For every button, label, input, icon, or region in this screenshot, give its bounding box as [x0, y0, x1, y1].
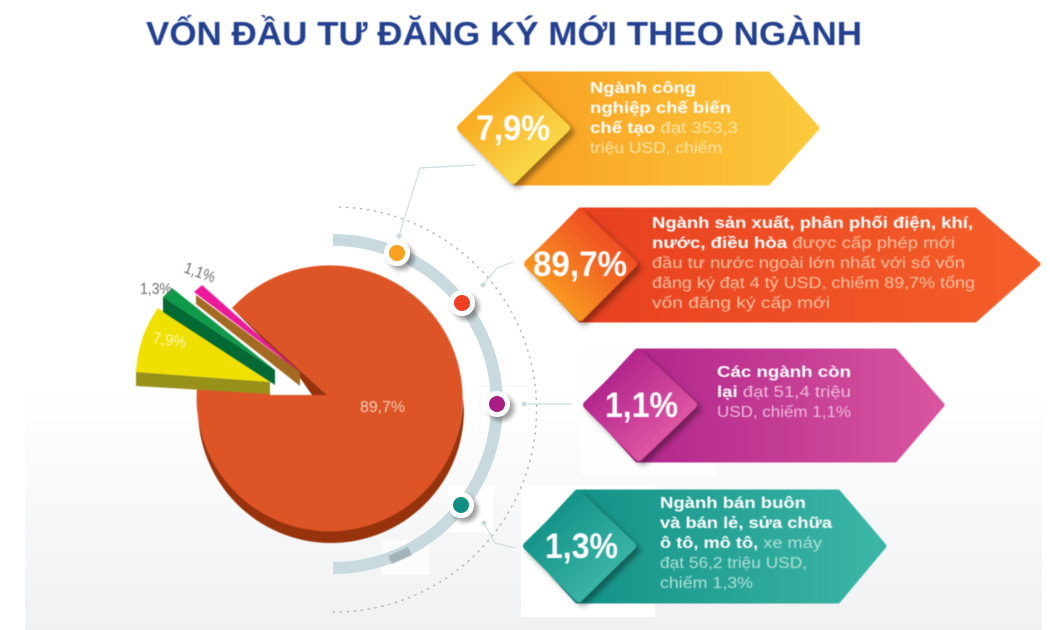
- pie chart: [136, 260, 464, 543]
- marker: teal: [448, 492, 474, 518]
- text: 1,3%: [660, 495, 832, 592]
- text: 7,9%: triệu USD, chiếm: [590, 140, 722, 157]
- panel: 1,1%: [587, 351, 942, 460]
- text: 1,3%: Ngành bán buôn: [660, 495, 806, 512]
- badge: 1,3%: [527, 495, 632, 598]
- text: 7,9%: nghiệp chế biến: [590, 100, 731, 117]
- marker: orange: [384, 240, 410, 266]
- text: 7,9%: chế tạo đạt 353,3: [590, 120, 738, 137]
- badge: 7,9%: [461, 77, 566, 180]
- text: 7,9%: [590, 80, 738, 157]
- connector: teal: [482, 521, 515, 548]
- connector: orange: [397, 165, 475, 238]
- title: VỐN ĐẦU TƯ ĐĂNG KÝ MỚI THEO NGÀNH: [146, 14, 862, 52]
- text: 89,7%: Ngành sản xuất, phân phối điện, khí,: [652, 215, 973, 232]
- badge: 1,3%: 1,3%: [545, 527, 618, 566]
- badge: 7,9%: 7,9%: [476, 109, 550, 148]
- text: 1,1%: Các ngành còn: [717, 364, 851, 381]
- text: 1,3%: chiếm 1,3%: [660, 575, 753, 592]
- connector: red: [481, 262, 513, 287]
- text: 7,9%: Ngành công: [590, 80, 696, 97]
- pie labels: 1,3%: [140, 281, 172, 298]
- marker: red: [449, 290, 475, 316]
- slice: 1,3%: [163, 288, 275, 385]
- text: 1,3%: và bán lẻ, sửa chữa: [660, 515, 832, 532]
- badge: 1,1%: [587, 354, 693, 457]
- text: 89,7%: [652, 215, 975, 312]
- dotted outer arc: [329, 207, 537, 612]
- connector: purple: [522, 402, 572, 406]
- text: 89,7%: nước, điều hòa được cấp phép mới: [652, 235, 955, 252]
- badge: 89,7%: [528, 213, 633, 317]
- slice: 89,7%: [197, 265, 464, 543]
- panel: 89,7%: [528, 210, 1038, 320]
- text: 89,7%: đăng ký đạt 4 tỷ USD, chiếm 89,7% tổng: [652, 275, 975, 292]
- pie labels: 89,7%: [360, 399, 405, 416]
- slice: 7,9%: [136, 308, 270, 394]
- slice: 1,1%: [194, 285, 300, 386]
- text: 89,7%: vốn đăng ký cấp mới: [652, 295, 830, 312]
- pie labels: 1,1%: [182, 260, 218, 287]
- ring arc with markers: [333, 165, 572, 568]
- panel: 1,3%: [527, 492, 884, 601]
- panel: 7,9%: [461, 74, 817, 183]
- text: 1,1%: [717, 364, 851, 421]
- text: 89,7%: đầu tư nước ngoài lớn nhất với số vốn: [652, 255, 965, 272]
- badge: 1,1%: 1,1%: [605, 386, 678, 425]
- text: 1,1%: lại đạt 51,4 triệu: [717, 384, 851, 401]
- pie labels: 7,9%: [151, 330, 187, 352]
- text: 1,1%: USD, chiếm 1,1%: [717, 404, 851, 421]
- text: 1,3%: ô tô, mô tô, xe máy: [660, 535, 822, 552]
- pie labels: [140, 260, 405, 416]
- badge: 89,7%: 89,7%: [533, 245, 627, 284]
- text: 1,3%: đạt 56,2 triệu USD,: [660, 555, 807, 572]
- marker: purple: [484, 391, 510, 417]
